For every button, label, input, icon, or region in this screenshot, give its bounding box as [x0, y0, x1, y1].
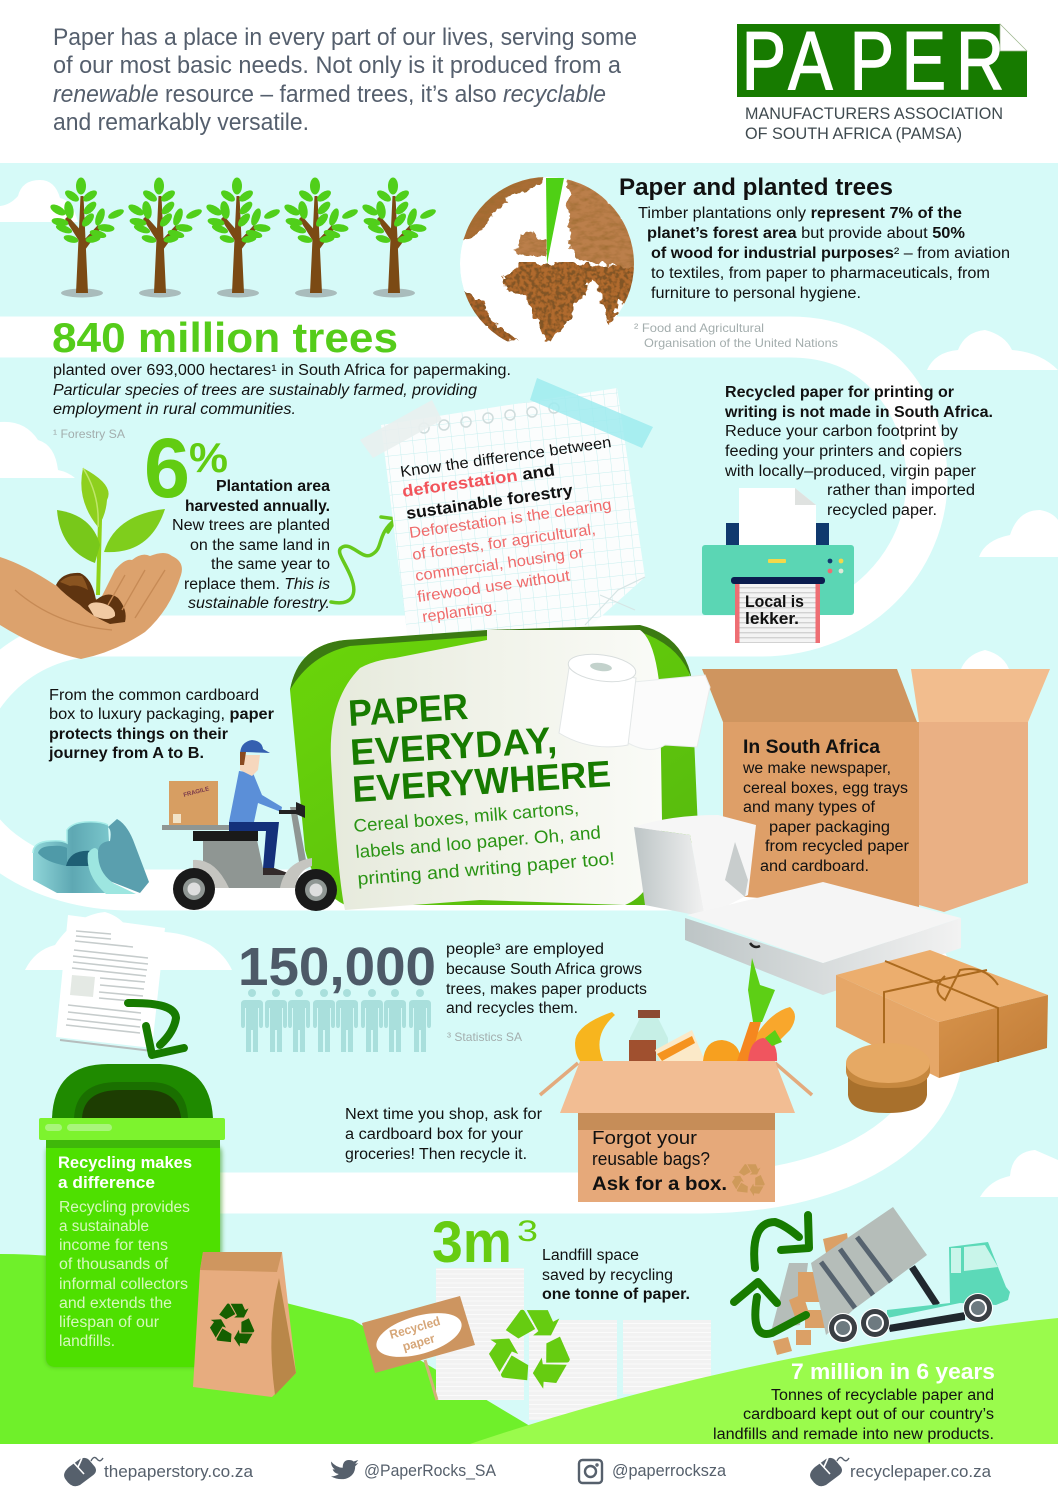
hill: dark green	[0, 1254, 560, 1444]
icon: document	[56, 915, 165, 1051]
noodle box	[634, 815, 756, 917]
bin text: lifespan of our	[59, 1314, 159, 1331]
icon: mouse	[64, 1457, 103, 1486]
note text	[399, 434, 613, 626]
footnote 2: ² Food and Agricultural	[634, 321, 764, 335]
box text: from recycled paper	[765, 838, 909, 855]
text: ask for a box: a cardboard box for your	[345, 1126, 523, 1143]
logo: PAMSA	[737, 14, 1027, 143]
pizza box	[685, 882, 961, 995]
text: landfill space: saved by recycling	[542, 1267, 673, 1284]
intro text: renewable resource – farmed trees, it’s also recyclable	[53, 81, 606, 108]
statistic: 150,000: 150,000	[238, 937, 436, 997]
footer link: instagram: @paperrocksza	[612, 1461, 727, 1480]
note text: deforestation and	[401, 461, 556, 501]
round box	[846, 1043, 930, 1113]
icon: heart box	[33, 819, 149, 894]
box text: and cardboard.	[760, 858, 869, 875]
bin heading: Recycling makes	[58, 1153, 192, 1172]
text: plantation area	[172, 478, 330, 612]
icon: twitter	[331, 1460, 358, 1479]
bin text: and extends the	[59, 1295, 172, 1312]
text: 7 million in 6 years: 7 million in 6 years	[791, 1359, 995, 1384]
card heading	[347, 686, 612, 810]
icon: paper bag	[193, 1252, 296, 1397]
box text: In South Africa	[743, 737, 880, 758]
note text: Deforestation is the clearing	[408, 496, 613, 542]
intro text: of our most basic needs. Not only is it produced from a	[53, 52, 622, 79]
box text: paper packaging	[769, 819, 890, 836]
note text: Know the difference between	[399, 434, 612, 481]
logo: PAMSA: PAPER	[742, 14, 1004, 107]
footnote 1: ¹ Forestry SA	[53, 427, 125, 441]
box text: and many types of	[743, 799, 876, 816]
panel: recycled paper text: Recycled paper for printing or	[725, 384, 954, 401]
panel: recycled paper text: Reduce your carbon footprint by	[725, 423, 958, 440]
bin heading	[58, 1153, 192, 1192]
bin text: landfills.	[59, 1333, 115, 1350]
arrow: document to bin	[128, 1003, 184, 1055]
icon: toilet roll	[559, 650, 710, 750]
grocery box text: reusable bags?	[592, 1149, 710, 1169]
intro text: and remarkably versatile.	[53, 109, 309, 136]
statistic: 3m3: 3	[517, 1215, 538, 1248]
icon: recycle arrows	[734, 1215, 809, 1334]
icon: delivery scooter	[162, 740, 337, 911]
text: employed: trees, makes paper products	[446, 981, 647, 998]
grocery box	[540, 1061, 812, 1202]
text: timber plantations: Timber plantations only represent 7% of the	[638, 205, 962, 222]
note spiral holes	[419, 403, 559, 433]
text: landfill space: one tonne of paper.	[542, 1286, 690, 1303]
text: 7 million in 6 years: cardboard kept out of our country’s	[743, 1406, 994, 1423]
footnote 3: ³ Statistics SA	[447, 1030, 522, 1044]
panel: recycled paper text	[724, 384, 993, 519]
printer label	[745, 592, 804, 628]
logo: PAMSA: MANUFACTURERS ASSOCIATION	[745, 105, 1003, 123]
text: plantation area: sustainable forestry.	[188, 595, 330, 612]
footnote 2	[634, 321, 838, 350]
logo: PAMSA: OF SOUTH AFRICA (PAMSA)	[745, 125, 962, 143]
panel: recycled paper text: writing is not made in South Africa.	[724, 404, 993, 421]
card text	[353, 798, 615, 889]
icon: people row	[241, 989, 431, 1052]
icon: recycle symbol	[483, 1310, 578, 1393]
card heading: EVERYDAY,	[349, 719, 558, 773]
footer link: twitter: @PaperRocks_SA	[364, 1461, 497, 1480]
panel: recycled paper text: recycled paper.	[827, 502, 937, 519]
card text: printing and writing paper too!	[357, 848, 615, 889]
sign: recycled paper	[362, 1296, 475, 1400]
footer link: website: thepaperstory.co.za	[104, 1462, 254, 1481]
panel: note paper	[360, 378, 653, 640]
statistic: 6%	[144, 421, 228, 515]
intro text	[53, 24, 637, 136]
card text: Cereal boxes, milk cartons,	[353, 798, 580, 836]
footer	[0, 1444, 1058, 1497]
text: plantation area: replace them. This is	[184, 576, 330, 593]
text: landfill space	[542, 1247, 690, 1303]
text: ask for a box: Next time you shop, ask for	[345, 1106, 542, 1123]
note text: of forests, for agricultural,	[411, 521, 597, 564]
note text: replanting.	[421, 599, 498, 626]
trees row	[49, 178, 437, 298]
statistic: 6%: 6	[144, 421, 190, 515]
text: packaging: journey from A to B.	[48, 745, 204, 762]
icon: hand with seedling	[0, 468, 182, 659]
footnote 2: Organisation of the United Nations	[644, 336, 838, 350]
bin text: of thousands of	[59, 1256, 169, 1273]
card heading: EVERYWHERE	[351, 753, 612, 810]
note text: firewood use without	[416, 567, 572, 606]
icon: instagram	[579, 1460, 602, 1483]
groceries	[575, 958, 795, 1061]
statistic: 3m3: 3m	[432, 1210, 512, 1275]
clouds	[0, 180, 1058, 1197]
grocery box text	[592, 1128, 727, 1195]
intro text: Paper has a place in every part of our lives, serving some	[53, 24, 637, 51]
text: 7 million in 6 years: landfills and remade into new products.	[713, 1426, 994, 1443]
box text	[742, 737, 909, 875]
text: planted hectares: planted over 693,000 hectares¹ in South Africa for papermaking.	[53, 362, 511, 379]
icon: globe	[460, 177, 634, 342]
text: planted hectares: employment in rural communities.	[53, 401, 296, 418]
text: employed: because South Africa grows	[446, 961, 642, 978]
grocery box text: Ask for a box.	[592, 1174, 727, 1195]
text: timber plantations: to textiles, from paper to pharmaceuticals, from	[651, 265, 990, 282]
small recycle icon	[730, 1164, 768, 1198]
kraft gift box	[836, 950, 1048, 1078]
text: packaging: protects things on their	[49, 726, 228, 743]
background ribbon	[0, 337, 944, 1193]
arrow: squiggle to note	[331, 517, 396, 603]
text: ask for a box: groceries! Then recycle it.	[345, 1146, 527, 1163]
bin heading: a difference	[58, 1173, 155, 1192]
icon: printer	[702, 488, 854, 643]
text: 7 million in 6 years	[713, 1359, 995, 1443]
bin text	[59, 1199, 190, 1350]
text: employed	[446, 941, 647, 1017]
text: employed: people³ are employed	[446, 941, 604, 958]
text: 7 million in 6 years: Tonnes of recyclable paper and	[771, 1387, 994, 1404]
panel: recycled paper text: with locally–produced, virgin paper	[724, 463, 976, 480]
panel: paper everyday everywhere	[290, 625, 710, 910]
text: plantation area: the same year to	[211, 556, 330, 573]
panel: recycling bin	[39, 1064, 225, 1367]
bin text: Recycling provides	[59, 1199, 190, 1216]
bin text: informal collectors	[59, 1276, 188, 1293]
text: employed: and recycles them.	[446, 1000, 578, 1017]
paper stacks	[436, 1268, 711, 1420]
icon: recycling truck	[772, 1207, 1010, 1355]
text: packaging	[48, 687, 274, 762]
note text: sustainable forestry	[405, 481, 575, 523]
sign: recycled paper: paper	[401, 1331, 437, 1354]
text: timber plantations	[638, 205, 1010, 302]
printer label: Local is	[745, 592, 804, 611]
bin text: a sustainable	[59, 1218, 149, 1235]
text: ask for a box	[345, 1106, 542, 1163]
hill: light green	[470, 1318, 1058, 1444]
bin text: income for tens	[59, 1237, 168, 1254]
tape right	[530, 378, 653, 448]
footer link: recycle: recyclepaper.co.za	[850, 1462, 992, 1481]
panel: recycled paper text: rather than imported	[827, 482, 975, 499]
box text: we make newspaper,	[742, 760, 891, 777]
grocery box text: Forgot your	[592, 1128, 697, 1148]
text: plantation area: Plantation area	[216, 478, 330, 495]
text: packaging: From the common cardboard	[49, 687, 259, 704]
icon: mouse	[810, 1457, 849, 1486]
panel: recycled paper text: feeding your printers and copiers	[725, 443, 962, 460]
sign: recycled paper: Recycled	[388, 1314, 442, 1342]
globe wedge	[546, 178, 564, 264]
box text: cereal boxes, egg trays	[743, 780, 908, 797]
text: plantation area: on the same land in	[190, 537, 330, 554]
heading: Paper and planted trees: Paper and planted trees	[619, 174, 893, 201]
text: timber plantations: planet’s forest area but provide about 50%	[647, 225, 965, 242]
text: plantation area: harvested annually.	[185, 498, 330, 515]
text: timber plantations: of wood for industrial purposes ² – from aviation	[651, 245, 1010, 262]
card text: labels and loo paper. Oh, and	[355, 822, 602, 862]
statistic: 840 million trees: 840 million trees	[52, 314, 398, 361]
text: planted hectares: Particular species of trees are sustainably farmed, providing	[53, 382, 477, 399]
text: timber plantations: furniture to personal hygiene.	[651, 285, 861, 302]
icon: delivery scooter: FRAGILE	[183, 786, 210, 799]
text: planted hectares	[53, 362, 511, 418]
text: packaging: box to luxury packaging, paper	[49, 706, 274, 723]
text: plantation area: New trees are planted	[172, 517, 330, 534]
statistic: 6%: %	[189, 434, 228, 481]
card heading: PAPER	[347, 686, 469, 734]
text: landfill space: Landfill space	[542, 1247, 639, 1264]
note text: commercial, housing or	[414, 544, 585, 585]
printer label: lekker.	[745, 609, 799, 628]
tape left	[360, 400, 442, 458]
panel: cardboard box	[702, 669, 1050, 912]
